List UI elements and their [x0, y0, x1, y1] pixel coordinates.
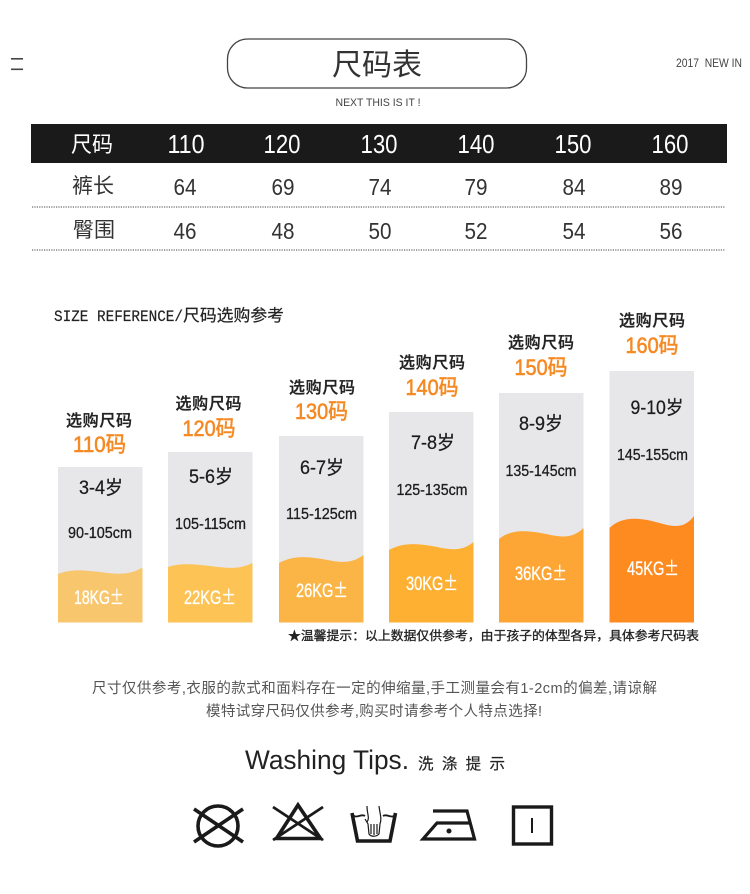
table row: hip: 46 [174, 218, 196, 244]
table row: trouser length: 89 [660, 174, 682, 200]
bar 150: 8-9岁 [519, 413, 563, 435]
icon: do not tumble dry [194, 806, 243, 846]
table row: trouser length: 64 [174, 174, 197, 200]
icon: iron [423, 811, 474, 839]
bar 160 [610, 312, 694, 622]
bar 130: 115-125cm [286, 506, 357, 523]
table row: hip: 56 [660, 218, 682, 244]
table header row: 110 [168, 129, 204, 159]
bar 140: 选购尺码 [399, 354, 465, 372]
icon: hand wash [352, 806, 396, 841]
bar 110: 3-4岁 [79, 477, 123, 499]
washing tips heading [245, 745, 505, 775]
title pill: 尺码表 [332, 49, 422, 82]
table header row: 130 [360, 129, 398, 159]
icon: dry in shade [514, 807, 552, 844]
table header row: 120 [264, 129, 300, 159]
bar 140: 125-135cm [396, 482, 468, 499]
bar 150 [499, 334, 584, 622]
table row: hip: 臀围 [73, 219, 115, 242]
table row: hip [73, 218, 682, 244]
bar 160: 145-155cm [617, 447, 688, 464]
table row: hip: 54 [562, 218, 586, 244]
bar 130: 选购尺码 [289, 379, 355, 397]
table row: trouser length: 74 [368, 174, 392, 200]
bar 120: 22KG± [184, 583, 236, 610]
table row: hip: 48 [272, 218, 294, 244]
bar 140: 140码 [406, 375, 458, 400]
bar 150: 36KG± [515, 559, 567, 586]
bar 140: 7-8岁 [411, 432, 455, 454]
size reference heading: 尺码选购参考 [183, 306, 284, 325]
bar 160: 160码 [626, 333, 678, 358]
icon: menu mark [11, 58, 23, 70]
title pill [228, 39, 526, 88]
table row: hip: 52 [464, 218, 488, 244]
bar 160: 选购尺码 [619, 312, 685, 330]
table header row: 尺码 [71, 132, 113, 157]
table row: trouser length: 裤长 [72, 175, 114, 198]
bar 110: 18KG± [74, 583, 124, 610]
size reference heading: SIZE REFERENCE/ [54, 308, 183, 326]
size reference heading [54, 306, 284, 326]
bar 150: 150码 [514, 355, 568, 380]
bar 150: 选购尺码 [508, 334, 574, 352]
icon: do not bleach [273, 805, 323, 840]
size table [31, 124, 727, 250]
table row: hip: 50 [368, 218, 392, 244]
bar 120: 选购尺码 [176, 395, 242, 413]
bar 160: 45KG± [627, 554, 679, 581]
bar 130: 26KG± [296, 576, 348, 603]
washing tips heading: 洗涤提示 [418, 755, 505, 773]
bar 140 [389, 354, 474, 622]
table row: trouser length [72, 174, 682, 200]
bar 140: 30KG± [406, 569, 458, 596]
bar 120: 5-6岁 [189, 466, 233, 488]
bar 110: 90-105cm [68, 525, 132, 542]
disclaimer text: 模特试穿尺码仅供参考,购买时请参考个人特点选择! [206, 703, 542, 720]
bar 130 [279, 379, 364, 622]
tag: 2017 new in: 2017 NEW IN [676, 58, 742, 70]
bar 120: 105-115cm [175, 516, 246, 533]
bar 160: 9-10岁 [630, 397, 684, 419]
bar 130: 6-7岁 [300, 457, 344, 479]
table row: trouser length: 69 [272, 174, 294, 200]
bar 110 [58, 412, 142, 622]
washing tips heading: Washing Tips. [245, 745, 409, 775]
footnote: ★温馨提示：以上数据仅供参考，由于孩子的体型各异，具体参考尺码表 [288, 628, 699, 643]
table header row: 150 [554, 129, 592, 159]
bar 150: 135-145cm [506, 463, 576, 480]
table row: trouser length: 79 [464, 174, 488, 200]
bar 120: 120码 [182, 416, 236, 441]
bar 110: 110码 [73, 432, 126, 457]
bar 120 [168, 395, 252, 622]
bar 130: 130码 [295, 399, 348, 424]
table header row [31, 124, 727, 163]
subtitle: NEXT THIS IS IT ! [336, 97, 420, 109]
disclaimer text [92, 680, 657, 720]
table row: trouser length: 84 [562, 174, 586, 200]
disclaimer text: 尺寸仅供参考,衣服的款式和面料存在一定的伸缩量,手工测量会有1-2cm的偏差,请谅解 [92, 680, 657, 697]
table header row: 160 [652, 129, 688, 159]
table header row: 140 [458, 129, 494, 159]
bar 110: 选购尺码 [66, 412, 132, 430]
